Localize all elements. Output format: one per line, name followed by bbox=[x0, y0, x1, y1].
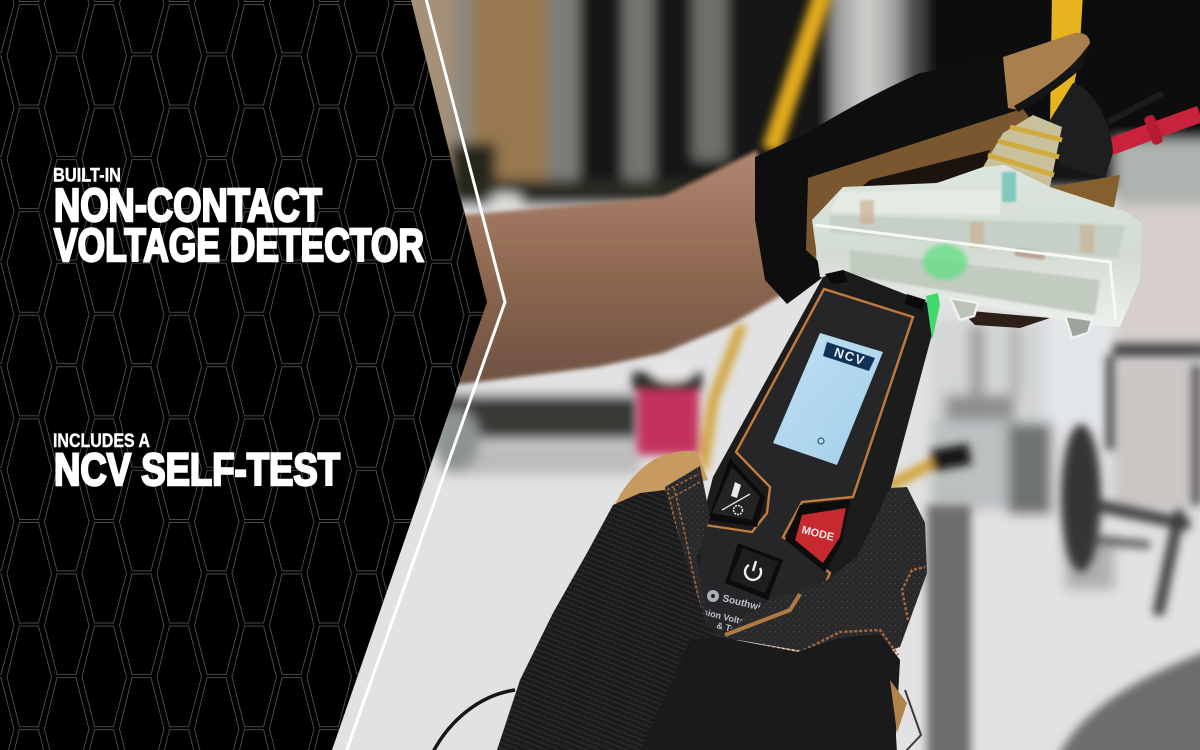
heading large: ncv self-test: NCV SELF-TEST bbox=[54, 444, 340, 495]
standby icon bbox=[818, 438, 824, 444]
tan thumb bbox=[1003, 33, 1090, 110]
feature 1 text bbox=[53, 164, 424, 271]
glove back bbox=[755, 57, 1018, 304]
heading small: built-in: BUILT-IN bbox=[53, 164, 121, 186]
Southwire branding: Southwire bbox=[721, 593, 771, 616]
ribbed black palm bbox=[492, 490, 900, 750]
MODE button: MODE bbox=[800, 524, 835, 544]
tester body bbox=[695, 270, 935, 640]
NCV tester bbox=[695, 270, 940, 640]
upper hand in glove with yellow cord bbox=[755, 0, 1200, 328]
prongs bbox=[950, 298, 978, 320]
power button bbox=[725, 543, 783, 600]
test probes bbox=[1108, 93, 1200, 147]
Southwire branding: & Te bbox=[716, 620, 736, 634]
flashlight and backlight button bbox=[708, 458, 765, 527]
yellow cord bbox=[1050, 0, 1083, 125]
green LED bbox=[926, 293, 940, 340]
right textured finger bbox=[720, 487, 927, 660]
LCD screen bbox=[773, 333, 883, 465]
transparent plug bbox=[812, 115, 1142, 338]
black cable bbox=[433, 690, 515, 750]
black hexagon panel bbox=[0, 0, 487, 750]
tan cuff patch bbox=[890, 680, 907, 733]
textured thumb side bbox=[665, 466, 710, 627]
MODE button bbox=[785, 500, 850, 572]
heading small: includes a: INCLUDES A bbox=[53, 430, 150, 452]
lower hand in glove holding tester bbox=[433, 451, 927, 750]
floor and walls, out of focus bbox=[300, 0, 1200, 750]
feature 2 text bbox=[53, 430, 340, 495]
heading large: voltage detector: VOLTAGE DETECTOR bbox=[54, 219, 424, 271]
finger bbox=[1050, 83, 1113, 178]
blurred equipment bbox=[632, 0, 1200, 750]
white chevron outline bbox=[345, 0, 505, 750]
Southwire branding bbox=[700, 590, 771, 634]
NCV label bbox=[823, 342, 875, 371]
NCV label: NCV bbox=[832, 344, 867, 369]
body bbox=[812, 165, 1142, 327]
arm bbox=[440, 150, 790, 387]
heading large: non-contact: NON-CONTACT bbox=[54, 179, 322, 231]
brown palm bbox=[800, 105, 1035, 275]
threaded neck bbox=[983, 115, 1062, 187]
Southwire branding: ision Voltage bbox=[700, 606, 756, 629]
background photo: workshop scene bbox=[300, 0, 1200, 750]
orange trim bbox=[705, 289, 913, 592]
tan fingertip bbox=[615, 451, 708, 505]
magenta spool bbox=[637, 387, 699, 455]
